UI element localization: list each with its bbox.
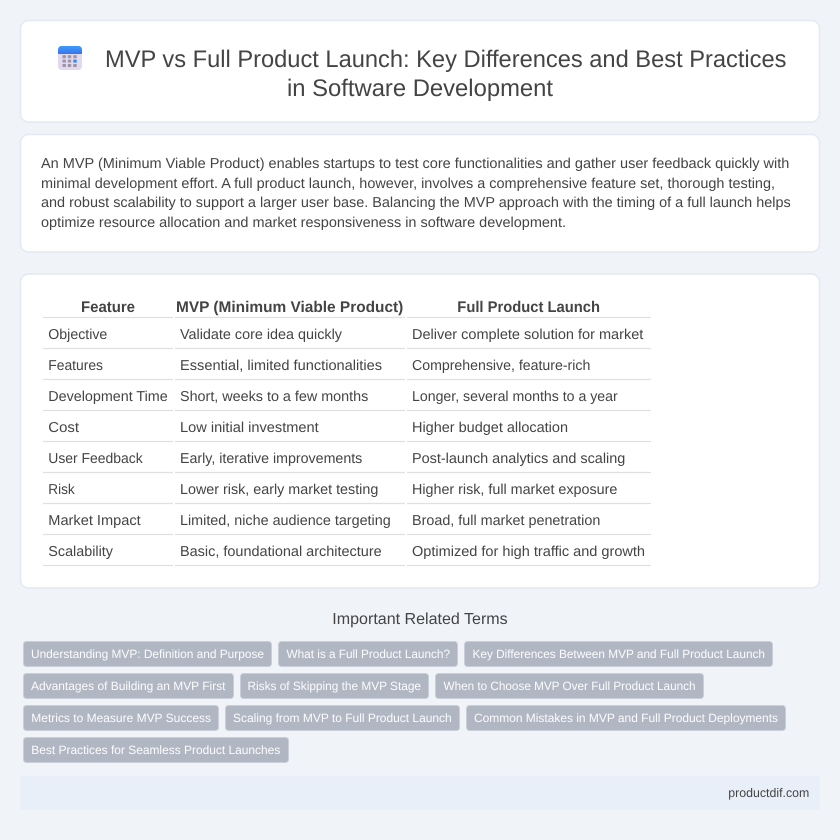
tag: What is a Full Product Launch? <box>286 647 450 661</box>
table row: features: Comprehensive, feature-rich <box>412 358 590 374</box>
footer <box>20 776 820 810</box>
table row: user feedback <box>48 451 625 467</box>
title: in Software Development <box>287 75 553 102</box>
table header: MVP (Minimum Viable Product) <box>176 299 403 316</box>
tag <box>240 674 428 698</box>
footer: productdif.com <box>728 786 809 800</box>
table row: objective: Objective <box>48 327 107 343</box>
table header: Feature <box>81 299 135 316</box>
table row: market impact: Limited, niche audience targeting <box>180 513 391 529</box>
text block: description paragraph: minimal development effort. A full product launch, however, involves a comprehensive feature set, thorough testing, <box>41 176 775 192</box>
table row: risk <box>48 482 617 498</box>
table row: cost: Higher budget allocation <box>412 420 568 436</box>
table row: cost: Low initial investment <box>180 420 319 436</box>
table row: cost: Cost <box>48 420 79 436</box>
table row: objective <box>48 327 643 343</box>
tag <box>24 738 288 762</box>
tag: Scaling from MVP to Full Product Launch <box>233 711 452 725</box>
table header: Full Product Launch <box>457 299 600 316</box>
table row: user feedback: Early, iterative improvements <box>180 451 362 467</box>
table row: features: Essential, limited functionalities <box>180 358 382 374</box>
table row: risk: Lower risk, early market testing <box>180 482 378 498</box>
panel: description <box>20 134 820 252</box>
tag <box>278 642 458 666</box>
text block: description paragraph <box>41 156 791 231</box>
tag: When to Choose MVP Over Full Product Launch <box>444 679 696 693</box>
table row: market impact: Market Impact <box>48 513 141 529</box>
panel: comparison table <box>20 274 820 588</box>
heading: important related terms: Important Related Terms <box>332 611 508 628</box>
tag <box>464 642 772 666</box>
table header <box>81 299 600 316</box>
title <box>105 46 786 102</box>
tag: Key Differences Between MVP and Full Product Launch <box>472 647 765 661</box>
tag <box>466 706 786 730</box>
text block: description paragraph: optimize resource allocation and market responsiveness in software development. <box>41 215 566 231</box>
icon: calendar <box>58 46 82 70</box>
table row: scalability: Scalability <box>48 544 114 560</box>
table row: scalability: Basic, foundational architecture <box>180 544 382 560</box>
table row: development time: Short, weeks to a few months <box>180 389 368 405</box>
table row: features <box>48 358 590 374</box>
table row: objective: Deliver complete solution for market <box>412 327 643 343</box>
tag <box>24 674 234 698</box>
table row: user feedback: Post-launch analytics and scaling <box>412 451 625 467</box>
table row: scalability <box>48 544 645 560</box>
tag: Best Practices for Seamless Product Launches <box>31 743 280 757</box>
table row: market impact <box>48 513 600 529</box>
tag: Understanding MVP: Definition and Purpose <box>31 647 264 661</box>
table row: development time <box>48 389 618 405</box>
text block: description paragraph: An MVP (Minimum Viable Product) enables startups to test core functionalities and gather user feedback quickly with <box>41 156 789 172</box>
table row: objective: Validate core idea quickly <box>180 327 343 343</box>
table row: user feedback: User Feedback <box>48 451 143 467</box>
table row: cost <box>48 420 568 436</box>
tag <box>24 706 218 730</box>
table row: development time: Development Time <box>48 389 168 405</box>
tag: Metrics to Measure MVP Success <box>31 711 211 725</box>
tag: Risks of Skipping the MVP Stage <box>248 679 421 693</box>
panel: header <box>20 20 820 122</box>
tag <box>226 706 460 730</box>
table row: market impact: Broad, full market penetration <box>412 513 600 529</box>
tag <box>436 674 704 698</box>
tag <box>24 642 272 666</box>
table row: scalability: Optimized for high traffic and growth <box>412 544 645 560</box>
title: MVP vs Full Product Launch: Key Differences and Best Practices <box>105 46 786 73</box>
text block: description paragraph: and robust scalability to support a larger user base. Balancing the MVP approach with the timing of a full launch helps <box>41 195 791 211</box>
panel: related term tags <box>24 642 786 762</box>
tag: Advantages of Building an MVP First <box>31 679 226 693</box>
table row: risk: Risk <box>48 482 75 498</box>
table row: risk: Higher risk, full market exposure <box>412 482 617 498</box>
table row: development time: Longer, several months to a year <box>412 389 618 405</box>
table row: features: Features <box>48 358 103 374</box>
tag: Common Mistakes in MVP and Full Product Deployments <box>474 711 778 725</box>
